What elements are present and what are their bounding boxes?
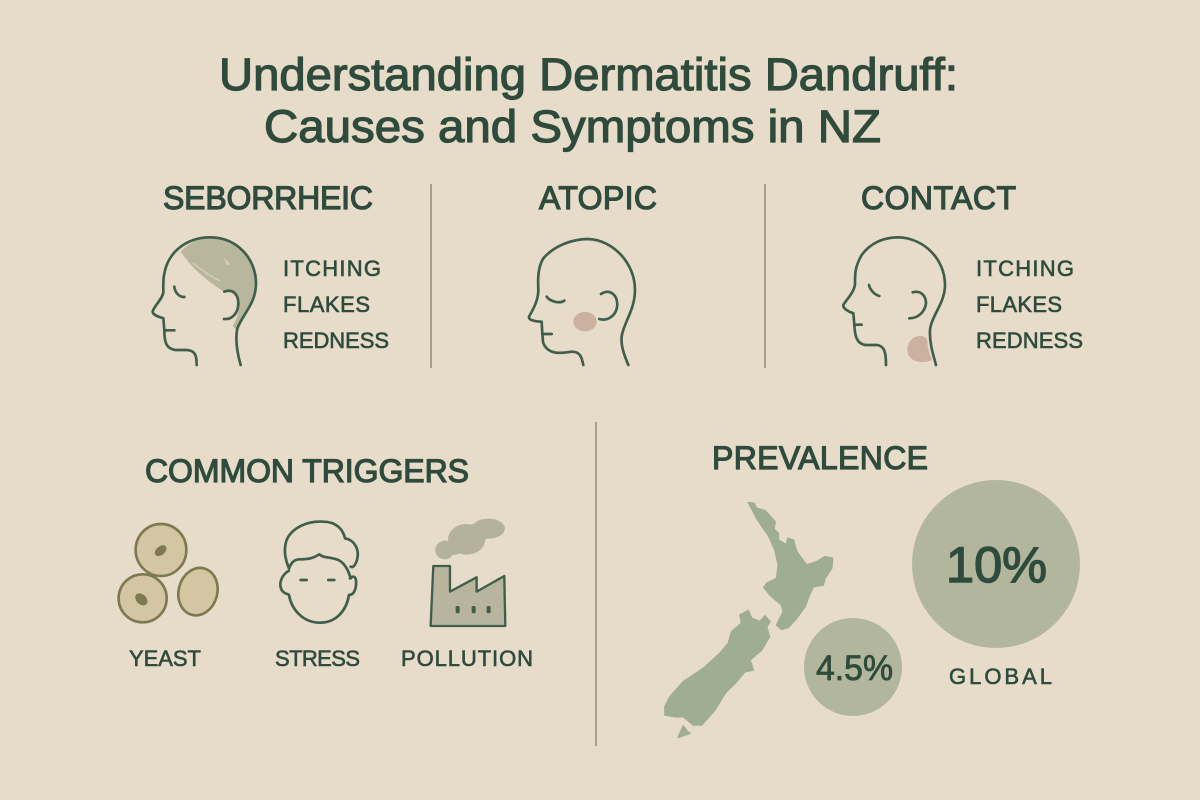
heading: contact: CONTACT	[861, 180, 1016, 216]
icon: yeast cells	[119, 524, 223, 622]
icon: head with scalp shading	[153, 237, 256, 365]
heading: seborrheic: SEBORRHEIC	[163, 180, 373, 216]
panel: common triggers	[119, 453, 533, 671]
heading: common triggers: COMMON TRIGGERS	[145, 453, 469, 489]
symptom list: contact: FLAKES	[976, 292, 1062, 317]
stat: NZ 4.5%: 4.5%	[816, 649, 893, 688]
stat: global 10%: 10%	[946, 537, 1047, 593]
symptom list: seborrheic: FLAKES	[283, 292, 370, 317]
heading: atopic: ATOPIC	[539, 180, 657, 216]
map: New Zealand	[665, 503, 833, 737]
panel: seborrheic	[153, 180, 389, 365]
stat: global 10%	[912, 480, 1080, 648]
panel: prevalence	[665, 440, 1080, 737]
title	[219, 49, 958, 152]
icon: head with neck patch	[843, 237, 945, 365]
icon: stressed face	[280, 522, 358, 623]
symptom list: seborrheic	[283, 256, 389, 353]
symptom list: seborrheic: ITCHING	[283, 256, 381, 281]
symptom list: contact	[976, 256, 1083, 353]
symptom list: seborrheic: REDNESS	[283, 328, 389, 353]
label: pollution: POLLUTION	[401, 646, 533, 671]
panel: contact	[843, 180, 1083, 365]
label: stress: STRESS	[275, 646, 360, 671]
stat: NZ 4.5%	[804, 618, 902, 716]
symptom list: contact: REDNESS	[976, 328, 1083, 353]
title: Causes and Symptoms in NZ	[264, 101, 881, 152]
label: global: GLOBAL	[949, 664, 1052, 689]
icon: head with cheek patch	[529, 239, 635, 365]
symptom list: contact: ITCHING	[976, 256, 1074, 281]
heading: prevalence: PREVALENCE	[712, 440, 928, 476]
label: yeast: YEAST	[129, 646, 201, 671]
panel: atopic	[529, 180, 657, 365]
title: Understanding Dermatitis Dandruff:	[219, 49, 958, 100]
icon: factory with smoke	[431, 519, 505, 626]
